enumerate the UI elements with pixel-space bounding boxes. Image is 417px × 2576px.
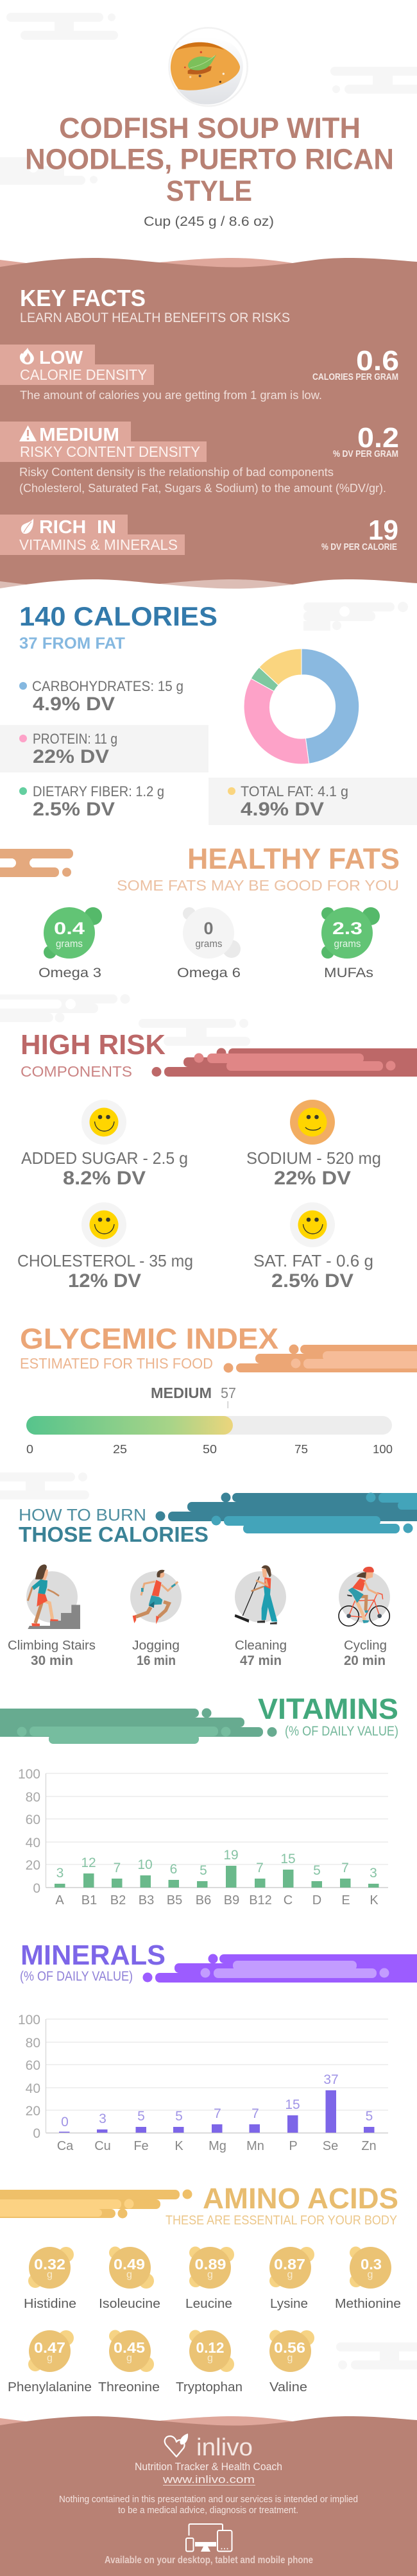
item: cholesterol: 12% DV	[68, 1270, 141, 1292]
amino: threonine: 0.45	[114, 2339, 145, 2356]
amino: lysine: Lysine	[270, 2297, 308, 2311]
amino: methionine	[335, 2247, 401, 2311]
availability note: Available on your desktop, tablet and mobile phone	[105, 2555, 313, 2566]
legend: carbohydrates	[19, 678, 183, 715]
fact: calorie density: LOW	[39, 348, 83, 368]
bar chart: vitamins: 5	[313, 1863, 321, 1878]
fact: calorie density: CALORIES PER GRAM	[312, 372, 398, 382]
amino: histidine: 0.32	[34, 2256, 65, 2273]
bar chart: vitamins: C	[284, 1893, 293, 1907]
amino: tryptophan	[176, 2330, 243, 2394]
bar chart: minerals: Mn	[246, 2139, 264, 2153]
logo: inlivo: inlivo	[196, 2434, 253, 2461]
stat: omega 3	[38, 907, 102, 980]
legend: dietary fiber: 2.5% DV	[33, 799, 115, 820]
activity: climbing stairs: Climbing Stairs	[8, 1639, 96, 1653]
icon: leaf	[21, 518, 33, 534]
amino: methionine: 0.3	[361, 2256, 382, 2273]
bar chart: minerals: 7	[251, 2106, 259, 2121]
activity: cycling: Cycling	[344, 1639, 387, 1653]
title: CODFISH SOUP WITH	[59, 112, 361, 144]
fact: rich in vitamins and minerals	[0, 515, 398, 555]
item: sodium	[246, 1100, 381, 1189]
heading: amino acids: AMINO ACIDS	[203, 2182, 398, 2215]
bar chart: vitamins: 0	[33, 1881, 40, 1896]
panel: key facts	[0, 258, 417, 594]
legend: total fat: TOTAL FAT: 4.1 g	[241, 783, 348, 799]
subheading: SOME FATS MAY BE GOOD FOR YOU	[117, 877, 399, 894]
panel: how to burn those calories	[8, 1492, 417, 1668]
panel: vitamins	[0, 1693, 398, 1907]
subheading: LEARN ABOUT HEALTH BENEFITS OR RISKS	[20, 311, 290, 325]
icon: flame	[20, 348, 34, 364]
amino: tryptophan: 0.12	[196, 2339, 225, 2356]
panel: footer	[0, 2416, 417, 2576]
heading: high risk: HIGH RISK	[21, 1029, 166, 1061]
bar chart: vitamins: 15	[280, 1852, 296, 1866]
heading: those calories: THOSE CALORIES	[19, 1523, 208, 1546]
item: cholesterol: CHOLESTEROL - 35 mg	[17, 1251, 193, 1270]
bar chart: vitamins: 7	[114, 1861, 121, 1875]
amino: phenylalanine: 0.47	[34, 2339, 65, 2356]
item: added sugar	[21, 1100, 188, 1189]
fact: rich in vitamins and minerals: RICH IN	[39, 517, 116, 538]
item: added sugar: ADDED SUGAR - 2.5 g	[21, 1148, 188, 1168]
heading: key facts: KEY FACTS	[20, 285, 146, 311]
bar chart: minerals: 100	[18, 2013, 40, 2027]
legend: dietary fiber	[19, 783, 164, 820]
fact: calorie density: CALORIE DENSITY	[20, 366, 147, 383]
fact: calorie density: 0.6	[356, 345, 399, 377]
activity: cycling: 20 min	[344, 1653, 386, 1668]
legend: total fat	[228, 783, 348, 820]
amino: leucine	[185, 2247, 234, 2311]
bar chart: minerals: Fe	[133, 2139, 149, 2153]
amino: phenylalanine: Phenylalanine	[8, 2380, 92, 2394]
amino: histidine: g	[47, 2269, 53, 2280]
amino: isoleucine: Isoleucine	[99, 2297, 160, 2311]
illustration: woman sweeping	[235, 1565, 286, 1625]
bar chart: minerals: 15	[285, 2097, 300, 2112]
stat: omega 6: grams	[195, 939, 223, 950]
legend: total fat: 4.9% DV	[241, 799, 324, 820]
amino: threonine: Threonine	[98, 2380, 160, 2394]
activity: cleaning: 47 min	[240, 1653, 282, 1668]
title: STYLE	[166, 175, 252, 207]
bar chart: minerals: 5	[137, 2109, 145, 2124]
legend: protein: 22% DV	[33, 746, 109, 767]
gauge scale: 50	[203, 1443, 217, 1456]
amino: valine: Valine	[269, 2380, 307, 2394]
illustration: man jogging	[130, 1570, 182, 1625]
amino: valine	[269, 2330, 314, 2394]
decoration: fats streak	[0, 849, 73, 877]
subheading: ESTIMATED FOR THIS FOOD	[20, 1355, 213, 1372]
item: sodium: SODIUM - 520 mg	[246, 1148, 381, 1168]
legend: protein: PROTEIN: 11 g	[33, 731, 117, 747]
item: cholesterol	[17, 1202, 193, 1292]
fact: risky content density: MEDIUM	[39, 425, 119, 445]
amino: histidine: Histidine	[24, 2297, 76, 2311]
bar chart: vitamins: K	[370, 1893, 379, 1907]
bar chart: minerals: 5	[175, 2109, 183, 2124]
heading: healthy fats: HEALTHY FATS	[187, 842, 400, 875]
amino: valine: 0.56	[274, 2339, 305, 2356]
bar chart: vitamins: B5	[167, 1893, 182, 1907]
donut chart: macronutrients	[244, 649, 359, 764]
stat: omega 3: grams	[56, 939, 83, 950]
amino: lysine	[269, 2247, 314, 2311]
bar chart: minerals: Se	[323, 2139, 338, 2153]
bar chart: vitamins: B9	[224, 1893, 239, 1907]
decoration: glycemic streak	[223, 1345, 417, 1373]
heading: 140 calories: 140 CALORIES	[19, 601, 217, 631]
item: sodium: 22% DV	[274, 1168, 351, 1189]
icon: warning	[19, 425, 37, 441]
icon: devices	[186, 2524, 232, 2552]
bar chart: vitamins: E	[341, 1893, 350, 1907]
bar chart: vitamins: 40	[26, 1836, 40, 1850]
logo: inlivo	[165, 2434, 253, 2461]
subheading: components: COMPONENTS	[21, 1063, 132, 1080]
decoration: burn streak	[155, 1492, 417, 1533]
fact: risky content density: Risky Content density is the relationship of bad components	[19, 466, 334, 479]
item: saturated fat	[253, 1202, 373, 1292]
decoration: vitamins streak	[0, 1708, 277, 1744]
serving size: Cup (245 g / 8.6 oz)	[144, 214, 274, 229]
bar chart: vitamins: 6	[170, 1862, 177, 1877]
fact: risky content density: (Cholesterol, Saturated Fat, Sugars & Sodium) to the amount (%DV/gr).	[19, 482, 386, 495]
gauge label: MEDIUM	[151, 1385, 212, 1401]
bar chart: minerals: 5	[366, 2109, 373, 2124]
amino: methionine: g	[368, 2269, 373, 2280]
stat: omega 6: 0	[203, 919, 214, 938]
item: saturated fat: SAT. FAT - 0.6 g	[253, 1251, 373, 1270]
heading: minerals: MINERALS	[21, 1940, 166, 1971]
item: saturated fat: 2.5% DV	[271, 1270, 353, 1292]
gauge scale: 0	[26, 1443, 33, 1456]
bar chart: vitamins: 3	[370, 1866, 377, 1881]
bar chart: minerals	[18, 2013, 388, 2153]
title	[25, 112, 394, 207]
stat: MUFAs: 2.3	[332, 919, 362, 938]
bar chart: minerals: P	[289, 2139, 298, 2153]
bar chart: minerals: Zn	[361, 2139, 377, 2153]
bar chart: vitamins: B12	[249, 1893, 272, 1907]
heading: how to burn: HOW TO BURN	[19, 1505, 146, 1524]
bar chart: vitamins: 12	[81, 1855, 96, 1870]
gauge bar	[26, 1416, 392, 1435]
bar chart: vitamins: 20	[26, 1858, 40, 1873]
stat: MUFAs: MUFAs	[324, 966, 373, 980]
bar chart: vitamins: 3	[56, 1866, 64, 1881]
fact: rich in vitamins and minerals: 19	[368, 515, 398, 546]
fact: risky content density	[0, 422, 399, 495]
decoration: amino streak	[0, 2189, 192, 2219]
amino: phenylalanine: g	[47, 2353, 53, 2364]
tagline: Nutrition Tracker & Health Coach	[135, 2461, 282, 2473]
fact: rich in vitamins and minerals: % DV PER CALORIE	[321, 542, 397, 552]
amino: isoleucine	[99, 2247, 160, 2311]
bar chart: minerals: 20	[26, 2104, 40, 2119]
stat: MUFAs: grams	[334, 939, 361, 950]
amino: valine: g	[287, 2353, 293, 2364]
illustration: woman climbing stairs	[26, 1564, 80, 1629]
disclaimer: to be a medical advice, diagnosis or treatment.	[118, 2505, 298, 2516]
activity: climbing stairs	[8, 1564, 96, 1668]
panel: calories	[0, 601, 417, 825]
title: NOODLES, PUERTO RICAN	[25, 142, 394, 176]
amino: tryptophan: g	[207, 2353, 213, 2364]
bar chart: vitamins: 5	[200, 1863, 207, 1878]
bar chart: minerals: Cu	[94, 2139, 111, 2153]
stat: MUFAs	[321, 907, 380, 980]
amino: leucine: Leucine	[185, 2297, 232, 2311]
amino: leucine: g	[207, 2269, 213, 2280]
fact: risky content density: 0.2	[357, 422, 399, 454]
panel: healthy fats	[0, 842, 400, 980]
gauge label	[151, 1385, 236, 1408]
gauge scale: 25	[113, 1443, 127, 1456]
activity: jogging	[130, 1570, 182, 1668]
activity: jogging: Jogging	[132, 1639, 180, 1653]
bar chart: minerals: 40	[26, 2081, 40, 2096]
amino: phenylalanine	[8, 2330, 92, 2394]
bar chart: vitamins: B6	[196, 1893, 211, 1907]
bar chart: minerals: 60	[26, 2058, 40, 2073]
website link: www.inlivo.com	[162, 2474, 255, 2486]
bar chart: minerals: 3	[99, 2111, 106, 2126]
amino: methionine: Methionine	[335, 2297, 401, 2311]
amino: histidine	[24, 2247, 76, 2311]
stat: omega 6	[177, 907, 241, 980]
legend: protein	[19, 731, 117, 767]
bar chart: vitamins: D	[312, 1893, 321, 1907]
subheading: 37 from fat: 37 FROM FAT	[19, 635, 125, 653]
legend: dietary fiber: DIETARY FIBER: 1.2 g	[33, 783, 164, 799]
stat: omega 3: Omega 3	[38, 966, 101, 980]
icon: soup bowl	[169, 28, 248, 106]
bar chart: vitamins: B3	[139, 1893, 154, 1907]
decoration: minerals streak	[142, 1954, 417, 1983]
fact: rich in vitamins and minerals: VITAMINS & MINERALS	[19, 536, 178, 553]
bar chart: minerals: 7	[214, 2106, 221, 2121]
fact: risky content density: % DV PER GRAM	[333, 449, 398, 459]
amino: isoleucine: 0.49	[114, 2256, 145, 2273]
illustration: woman cycling	[339, 1567, 390, 1626]
activity: jogging: 16 min	[137, 1653, 176, 1668]
stat: omega 6: Omega 6	[177, 966, 241, 980]
amino: tryptophan: Tryptophan	[176, 2380, 243, 2394]
activity: cycling	[339, 1567, 390, 1668]
legend: carbohydrates: CARBOHYDRATES: 15 g	[32, 678, 183, 694]
panel: high risk components	[17, 1029, 417, 1292]
bar chart: vitamins: 60	[26, 1813, 40, 1827]
fact: calorie density	[0, 345, 399, 402]
activity: climbing stairs: 30 min	[31, 1653, 73, 1668]
bar chart: minerals: K	[174, 2139, 183, 2153]
disclaimer	[59, 2495, 358, 2516]
amino: threonine: g	[126, 2353, 132, 2364]
panel: minerals	[18, 1940, 417, 2153]
heading: vitamins: VITAMINS	[258, 1693, 398, 1725]
bar chart: vitamins: 80	[26, 1790, 40, 1805]
bar chart: vitamins: 7	[256, 1861, 264, 1875]
bar chart: vitamins: B2	[110, 1893, 126, 1907]
subheading: (% OF DAILY VALUE)	[285, 1724, 398, 1739]
subheading: THESE ARE ESSENTIAL FOR YOUR BODY	[166, 2213, 397, 2228]
amino: leucine: 0.89	[195, 2256, 226, 2273]
gauge scale	[26, 1443, 393, 1456]
bar chart: vitamins: 10	[137, 1857, 153, 1872]
bar chart: vitamins	[18, 1767, 388, 1907]
amino: lysine: 0.87	[274, 2256, 305, 2273]
fact: calorie density: The amount of calories you are getting from 1 gram is low.	[20, 389, 322, 402]
activity: cleaning: Cleaning	[235, 1639, 287, 1653]
bar chart: vitamins: 100	[18, 1767, 40, 1782]
heading: glycemic index: GLYCEMIC INDEX	[20, 1322, 278, 1355]
amino: lysine: g	[287, 2269, 293, 2280]
gauge scale: 100	[373, 1443, 393, 1456]
stat: omega 3: 0.4	[54, 919, 85, 938]
bar chart: minerals: Mg	[208, 2139, 226, 2153]
bar chart: vitamins: B1	[81, 1893, 97, 1907]
bar chart: minerals: 80	[26, 2036, 40, 2051]
amino: threonine	[98, 2330, 160, 2394]
panel: amino acids	[0, 2182, 401, 2394]
gauge scale: 75	[294, 1443, 308, 1456]
bar chart: vitamins: 19	[223, 1848, 239, 1863]
activity: cleaning	[235, 1565, 287, 1668]
bar chart: minerals: 37	[323, 2072, 339, 2087]
bar chart: minerals: 0	[61, 2115, 69, 2129]
amino: isoleucine: g	[126, 2269, 132, 2280]
subheading: (% OF DAILY VALUE)	[20, 1969, 133, 1984]
disclaimer: Nothing contained in this presentation and our services is intended or implied	[59, 2495, 358, 2505]
bar chart: minerals: Ca	[57, 2139, 74, 2153]
bar chart: vitamins: 7	[341, 1861, 349, 1875]
legend: carbohydrates: 4.9% DV	[33, 694, 115, 715]
gauge label: 57	[221, 1385, 236, 1401]
fact: risky content density: RISKY CONTENT DENSITY	[20, 443, 200, 460]
item: added sugar: 8.2% DV	[63, 1168, 146, 1189]
panel: glycemic index	[20, 1322, 417, 1456]
bar chart: minerals: 0	[33, 2126, 40, 2141]
decoration: high risk streak	[151, 1048, 417, 1077]
bar chart: vitamins: A	[55, 1893, 64, 1907]
